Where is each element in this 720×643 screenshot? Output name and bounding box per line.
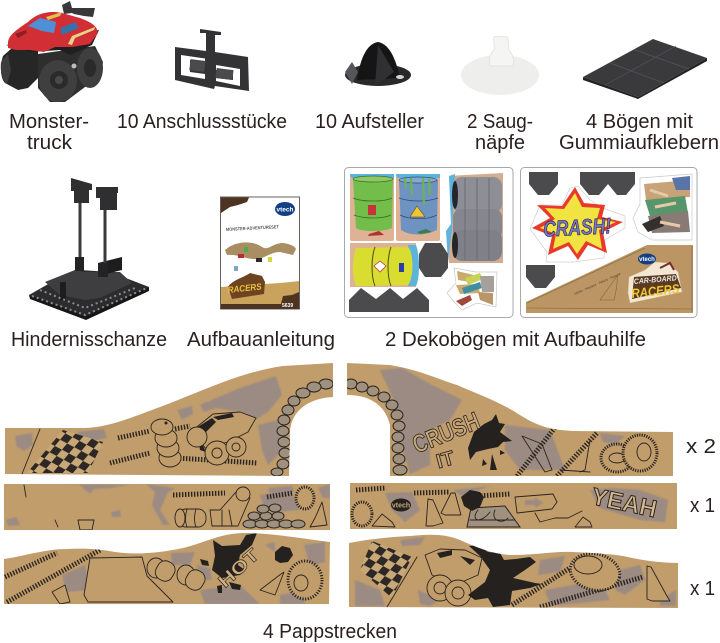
- label: 2 Dekobögen mit Aufbauhilfe: 2 Dekobögen mit Aufbauhilfe: [385, 329, 646, 351]
- sticker: crash burst: [530, 186, 625, 262]
- logo: Car-Board Racers: [628, 262, 682, 303]
- label: 4 Bögen mit Gummiaufklebern: 4 Bögen mit: [586, 111, 693, 133]
- icon: instruction manual: RACERS: [227, 281, 262, 295]
- multiplier: x 2: x 2: [686, 436, 716, 458]
- track piece: straight right: YEAH: [589, 483, 659, 523]
- track piece: wavy right: [349, 535, 678, 608]
- track piece: wavy left: [4, 533, 330, 604]
- sticker: yellow barrel: [350, 243, 419, 287]
- label: Aufbauanleitung: Aufbauanleitung: [187, 329, 335, 351]
- label: 10 Anschlussstücke: 10 Anschlussstücke: [117, 111, 287, 133]
- panel: sticker sheet 2: [520, 168, 697, 318]
- label: 10 Aufsteller: 10 Aufsteller: [315, 111, 424, 133]
- icon: obstacle ramp: [29, 178, 149, 320]
- label: 4 Pappstrecken: 4 Pappstrecken: [263, 621, 397, 643]
- icon: black stand: [345, 42, 411, 86]
- label: 2 Saugnäpfe: 2 Saug-: [467, 111, 533, 133]
- label: Monstertruck: truck: [27, 132, 73, 154]
- sticker: blue barrel: [396, 174, 440, 241]
- label: Monstertruck: Monster-: [9, 111, 89, 133]
- icon: instruction manual: 5639: [282, 303, 293, 309]
- sticker: kids cartoon: [633, 174, 692, 240]
- logo: vtech: [638, 254, 656, 264]
- sticker: tire stack: [446, 173, 503, 263]
- label: Hindernisschanze: Hindernisschanze: [11, 329, 167, 351]
- icon: instruction manual: [220, 197, 300, 309]
- track piece: ramp right: IT: [434, 447, 457, 473]
- label: 2 Saugnäpfe: [467, 111, 533, 154]
- icon: red monster truck: [1, 1, 103, 102]
- panel: sticker sheet 1: [344, 168, 513, 318]
- icon: connector piece: [175, 29, 249, 91]
- track piece: ramp left: [5, 363, 333, 476]
- tabs: dark pieces: [526, 172, 635, 288]
- multiplier: x 1: x 1: [690, 495, 715, 517]
- track piece: straight left: [4, 484, 330, 530]
- track piece: ramp right: [345, 363, 673, 476]
- icon: instruction manual: MONSTER-ADVENTURESET: [226, 224, 279, 232]
- track piece: straight right: vtech: [392, 502, 410, 510]
- label: 2 Saugnäpfe: näpfe: [475, 132, 525, 154]
- track piece: ramp right: CRUSH: [409, 407, 484, 459]
- sticker: kids cartoon: [447, 268, 497, 310]
- icon: suction cup: [461, 36, 539, 95]
- label: Monstertruck: [9, 111, 89, 154]
- multiplier: x 1: x 1: [690, 578, 715, 600]
- icon: instruction manual: vtech: [277, 206, 294, 214]
- logo: vtech: vtech: [639, 257, 655, 263]
- sticker: green barrel: [350, 174, 394, 241]
- track piece: wavy left: HOT: [214, 545, 263, 592]
- tabs: dark hexagon pieces: [349, 243, 448, 312]
- ramp: cardboard template: Höhe · Hauteur · Altura · Hoogte: [574, 272, 621, 296]
- logo: Car-Board Racers: CAR-BOARD: [633, 273, 678, 286]
- ramp: cardboard template: [526, 245, 693, 313]
- label: 4 Bögen mit Gummiaufklebern: [559, 111, 719, 154]
- label: 4 Bögen mit Gummiaufklebern: Gummiaufklebern: [559, 132, 719, 154]
- track piece: straight right: [350, 483, 677, 529]
- logo: Car-Board Racers: RACERS: [631, 281, 680, 301]
- sticker: crash burst: CRASH!: [543, 213, 612, 242]
- icon: rubber sticker sheet: [583, 39, 707, 99]
